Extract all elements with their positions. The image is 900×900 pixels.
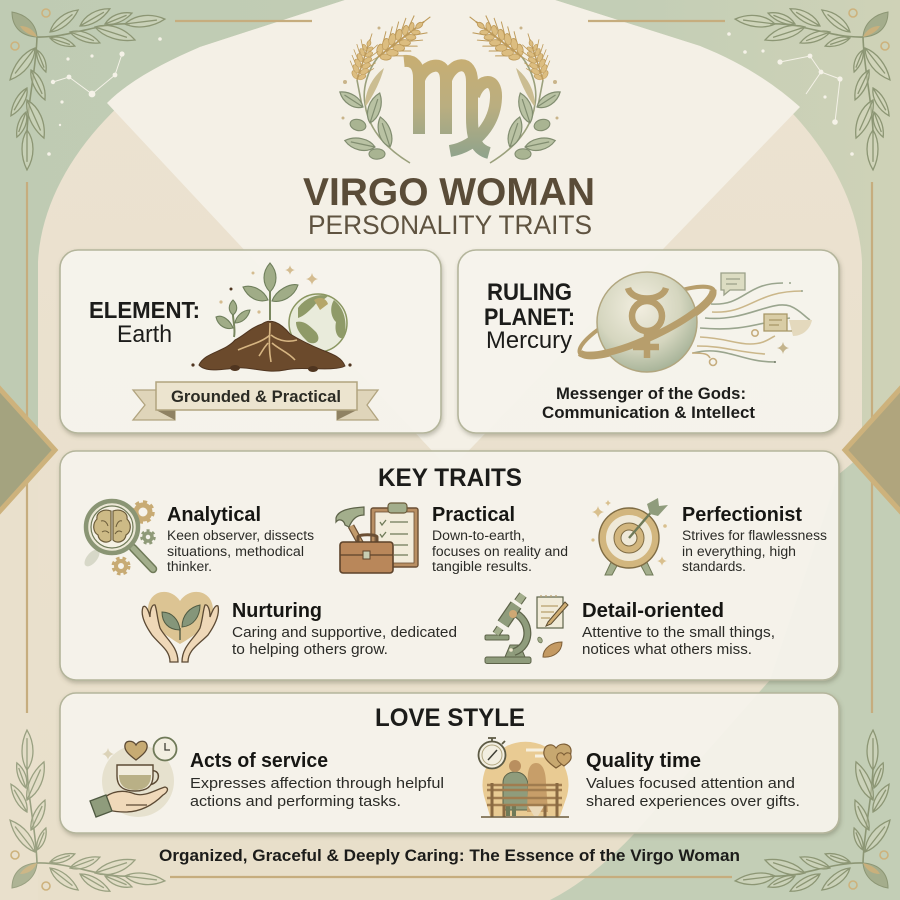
analytical description: thinker. [167, 559, 212, 574]
detail-oriented description: Attentive to the small things, [582, 624, 775, 641]
analytical title: Analytical [167, 504, 261, 526]
detail-oriented title: Detail-oriented [582, 600, 724, 622]
perfectionist description: Strives for flawlessness [682, 528, 827, 543]
nurturing description: Caring and supportive, dedicated [232, 624, 457, 641]
quality time title: Quality time [586, 750, 701, 772]
panel: ruling planet [458, 250, 839, 433]
practical title: Practical [432, 504, 515, 526]
practical description: tangible results. [432, 559, 532, 574]
wreath left [337, 5, 440, 163]
nurturing description: to helping others grow. [232, 641, 388, 658]
subtitle: PERSONALITY TRAITS [308, 210, 592, 240]
detail-oriented description [582, 624, 775, 658]
icon: microscope and notepad [485, 595, 568, 664]
wreath right [460, 5, 563, 163]
acts of service description [190, 775, 444, 810]
banner text: Grounded & Practical [171, 387, 341, 406]
right diamond [845, 378, 900, 522]
love: quality time [478, 738, 800, 817]
nurturing title: Nurturing [232, 600, 322, 622]
icon: toolbox and clipboard [336, 503, 418, 573]
panel: key traits [60, 451, 839, 680]
key traits heading: KEY TRAITS [378, 464, 522, 492]
panel: element [60, 250, 441, 433]
acts of service description: Expresses affection through helpful [190, 775, 444, 792]
trait: practical [336, 503, 568, 574]
corner leaves top left [6, 4, 166, 170]
quality time description [586, 775, 800, 810]
love: acts of service [90, 738, 444, 817]
constellation top right [727, 32, 854, 156]
analytical description [167, 528, 314, 574]
planet caption [542, 385, 756, 422]
detail-oriented description: notices what others miss. [582, 641, 752, 658]
trait: perfectionist [591, 498, 827, 575]
virgo symbol [404, 61, 496, 153]
perfectionist description [682, 528, 827, 574]
quality time description: shared experiences over gifts. [586, 793, 800, 810]
panel: love style [60, 693, 839, 833]
corner leaves bottom left [6, 730, 166, 896]
banner [133, 382, 378, 420]
quality time description: Values focused attention and [586, 775, 795, 792]
perfectionist description: in everything, high [682, 544, 796, 559]
planet caption: Communication & Intellect [542, 404, 756, 422]
planet name: Mercury [486, 327, 572, 354]
analytical description: situations, methodical [167, 544, 304, 559]
trait: detail-oriented [485, 595, 775, 664]
corner leaves bottom right [734, 730, 894, 896]
love style heading: LOVE STYLE [375, 704, 525, 732]
planet caption: Messenger of the Gods: [556, 385, 746, 403]
icon: couple on bench [478, 738, 571, 817]
icon: target and arrow [591, 498, 668, 575]
left diamond [0, 378, 55, 522]
ruling planet heading: PLANET: [484, 304, 575, 331]
trait: nurturing [142, 592, 457, 662]
perfectionist description: standards. [682, 559, 746, 574]
analytical description: Keen observer, dissects [167, 528, 314, 543]
icon: magnifier with brain [82, 501, 154, 574]
element heading: ELEMENT: [89, 297, 200, 323]
trait: analytical [82, 501, 314, 574]
constellation top left [47, 37, 162, 156]
icon: mercury planet [572, 272, 722, 372]
element name: Earth [117, 321, 172, 348]
nurturing description [232, 624, 457, 658]
perfectionist title: Perfectionist [682, 504, 802, 526]
ruling planet heading [484, 279, 575, 331]
icon: hand holding cup [90, 738, 176, 817]
ruling planet heading: RULING [487, 279, 572, 306]
corner leaves top right [734, 4, 894, 170]
acts of service description: actions and performing tasks. [190, 793, 401, 810]
practical description [432, 528, 568, 574]
icon: hands holding sprout [142, 592, 218, 662]
title: VIRGO WOMAN [303, 171, 595, 214]
acts of service title: Acts of service [190, 750, 328, 772]
practical description: focuses on reality and [432, 544, 568, 559]
icon: communication lines and bubbles [692, 273, 812, 366]
practical description: Down-to-earth, [432, 528, 525, 543]
icon: plants, soil and globe [191, 263, 352, 372]
footer tagline: Organized, Graceful & Deeply Caring: The Essence of the Virgo Woman [159, 846, 740, 865]
